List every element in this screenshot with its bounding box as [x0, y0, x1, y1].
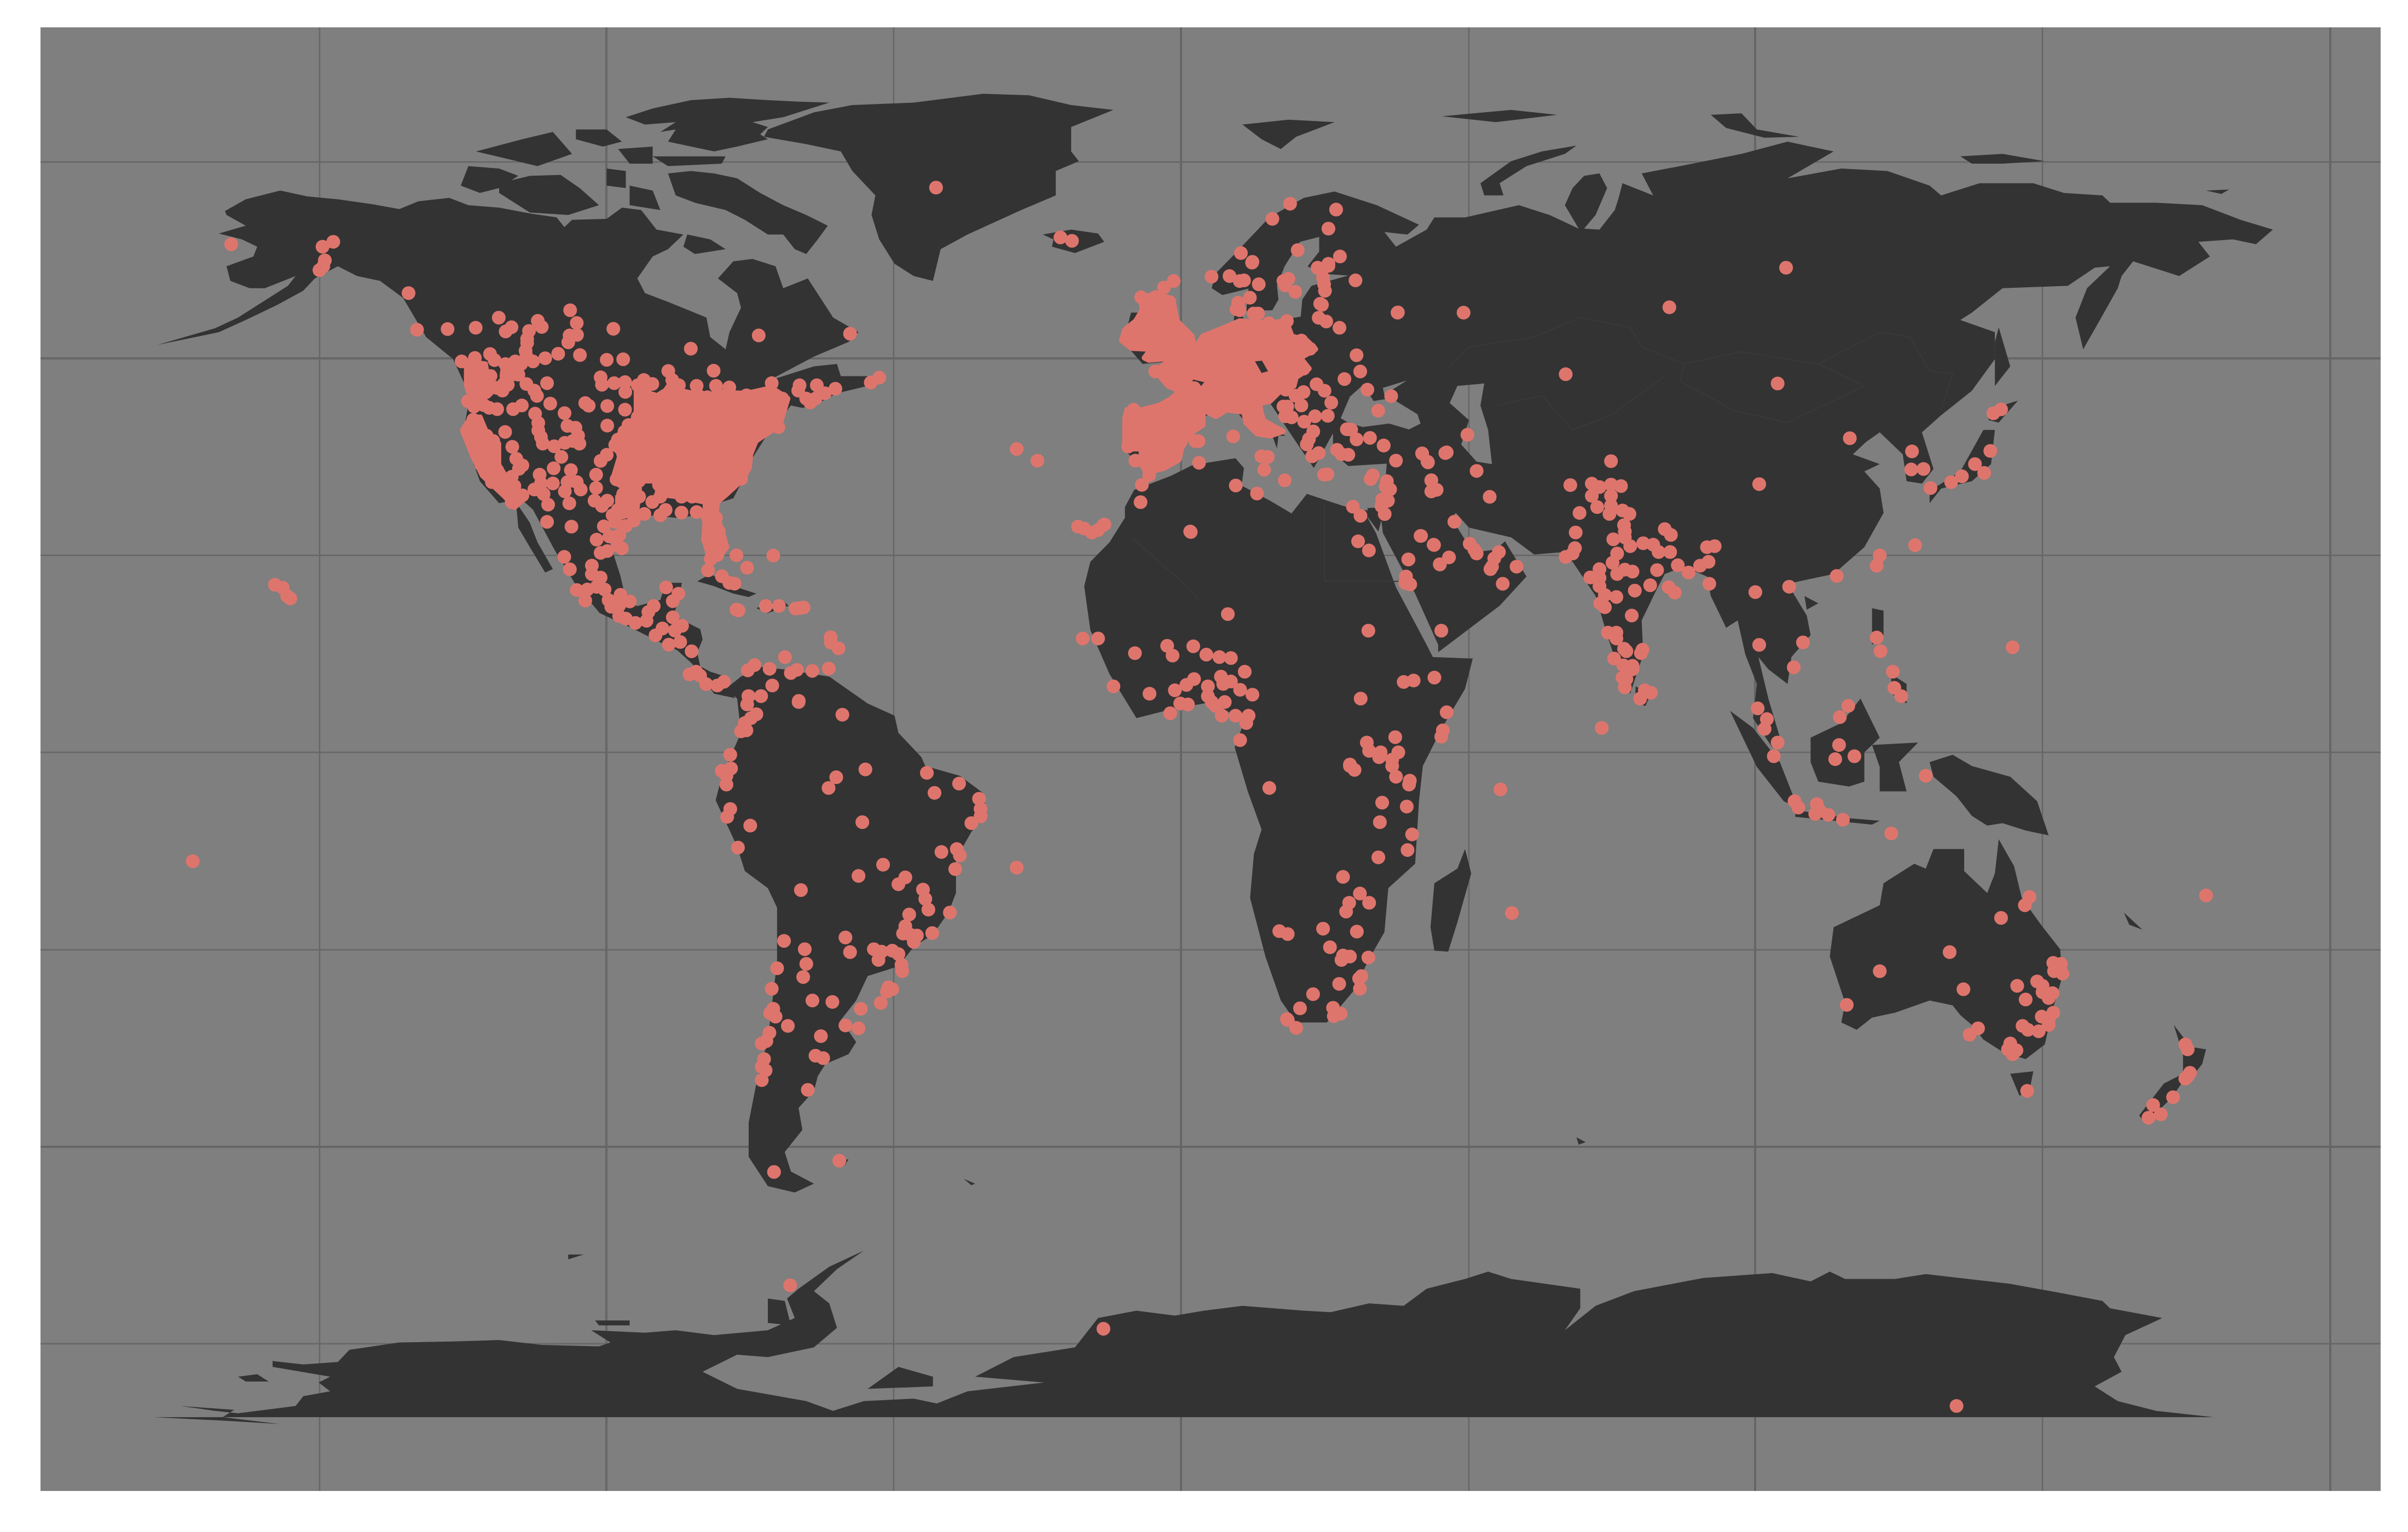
- canadian arctic islands: [461, 98, 829, 254]
- dense cluster: pacific northwest: [467, 362, 499, 401]
- continent: africa: [1084, 459, 1473, 1023]
- data points: [193, 188, 2206, 1406]
- points: asia and east africa: [1206, 204, 2013, 764]
- caribbean islands: [697, 574, 789, 613]
- iceland: [1043, 230, 1104, 253]
- peninsula: baja california: [516, 502, 553, 572]
- points: europe, north africa, near east: [1104, 263, 1445, 584]
- arctic and pacific islands of asia: [1124, 110, 2229, 835]
- dense cluster: continental europe: [1141, 321, 1316, 473]
- dense cluster: california coast: [462, 417, 526, 507]
- antarctica: [154, 1251, 2214, 1424]
- south america: [716, 667, 987, 1192]
- dense cluster: british isles: [1122, 293, 1194, 360]
- country borders: [1132, 317, 1953, 600]
- dense cluster: eastern united states: [612, 382, 788, 558]
- individual points: [448, 310, 838, 701]
- points: alaska, hawaii, greenland, iceland, atlantic and west africa: [231, 188, 1194, 755]
- points: north and central america: [448, 310, 838, 701]
- points: south america, antarctica, pacific: [193, 768, 1103, 1329]
- continent: north america: [158, 190, 879, 698]
- land masses: [154, 94, 2273, 1424]
- points: southern africa, indonesia, australia, new zealand: [1269, 766, 2206, 1406]
- australia and oceania: [1576, 839, 2206, 1145]
- dense cluster: portugal coast: [1125, 410, 1140, 449]
- dense cluster: inland northwest: [502, 362, 522, 382]
- falkland islands and south georgia: [833, 1159, 975, 1185]
- dense cluster: gulf coast: [618, 489, 639, 518]
- individual points: [1104, 263, 1445, 584]
- continent: eurasia: [1126, 142, 2273, 747]
- greenland: [764, 94, 1113, 281]
- madagascar: [1431, 849, 1471, 951]
